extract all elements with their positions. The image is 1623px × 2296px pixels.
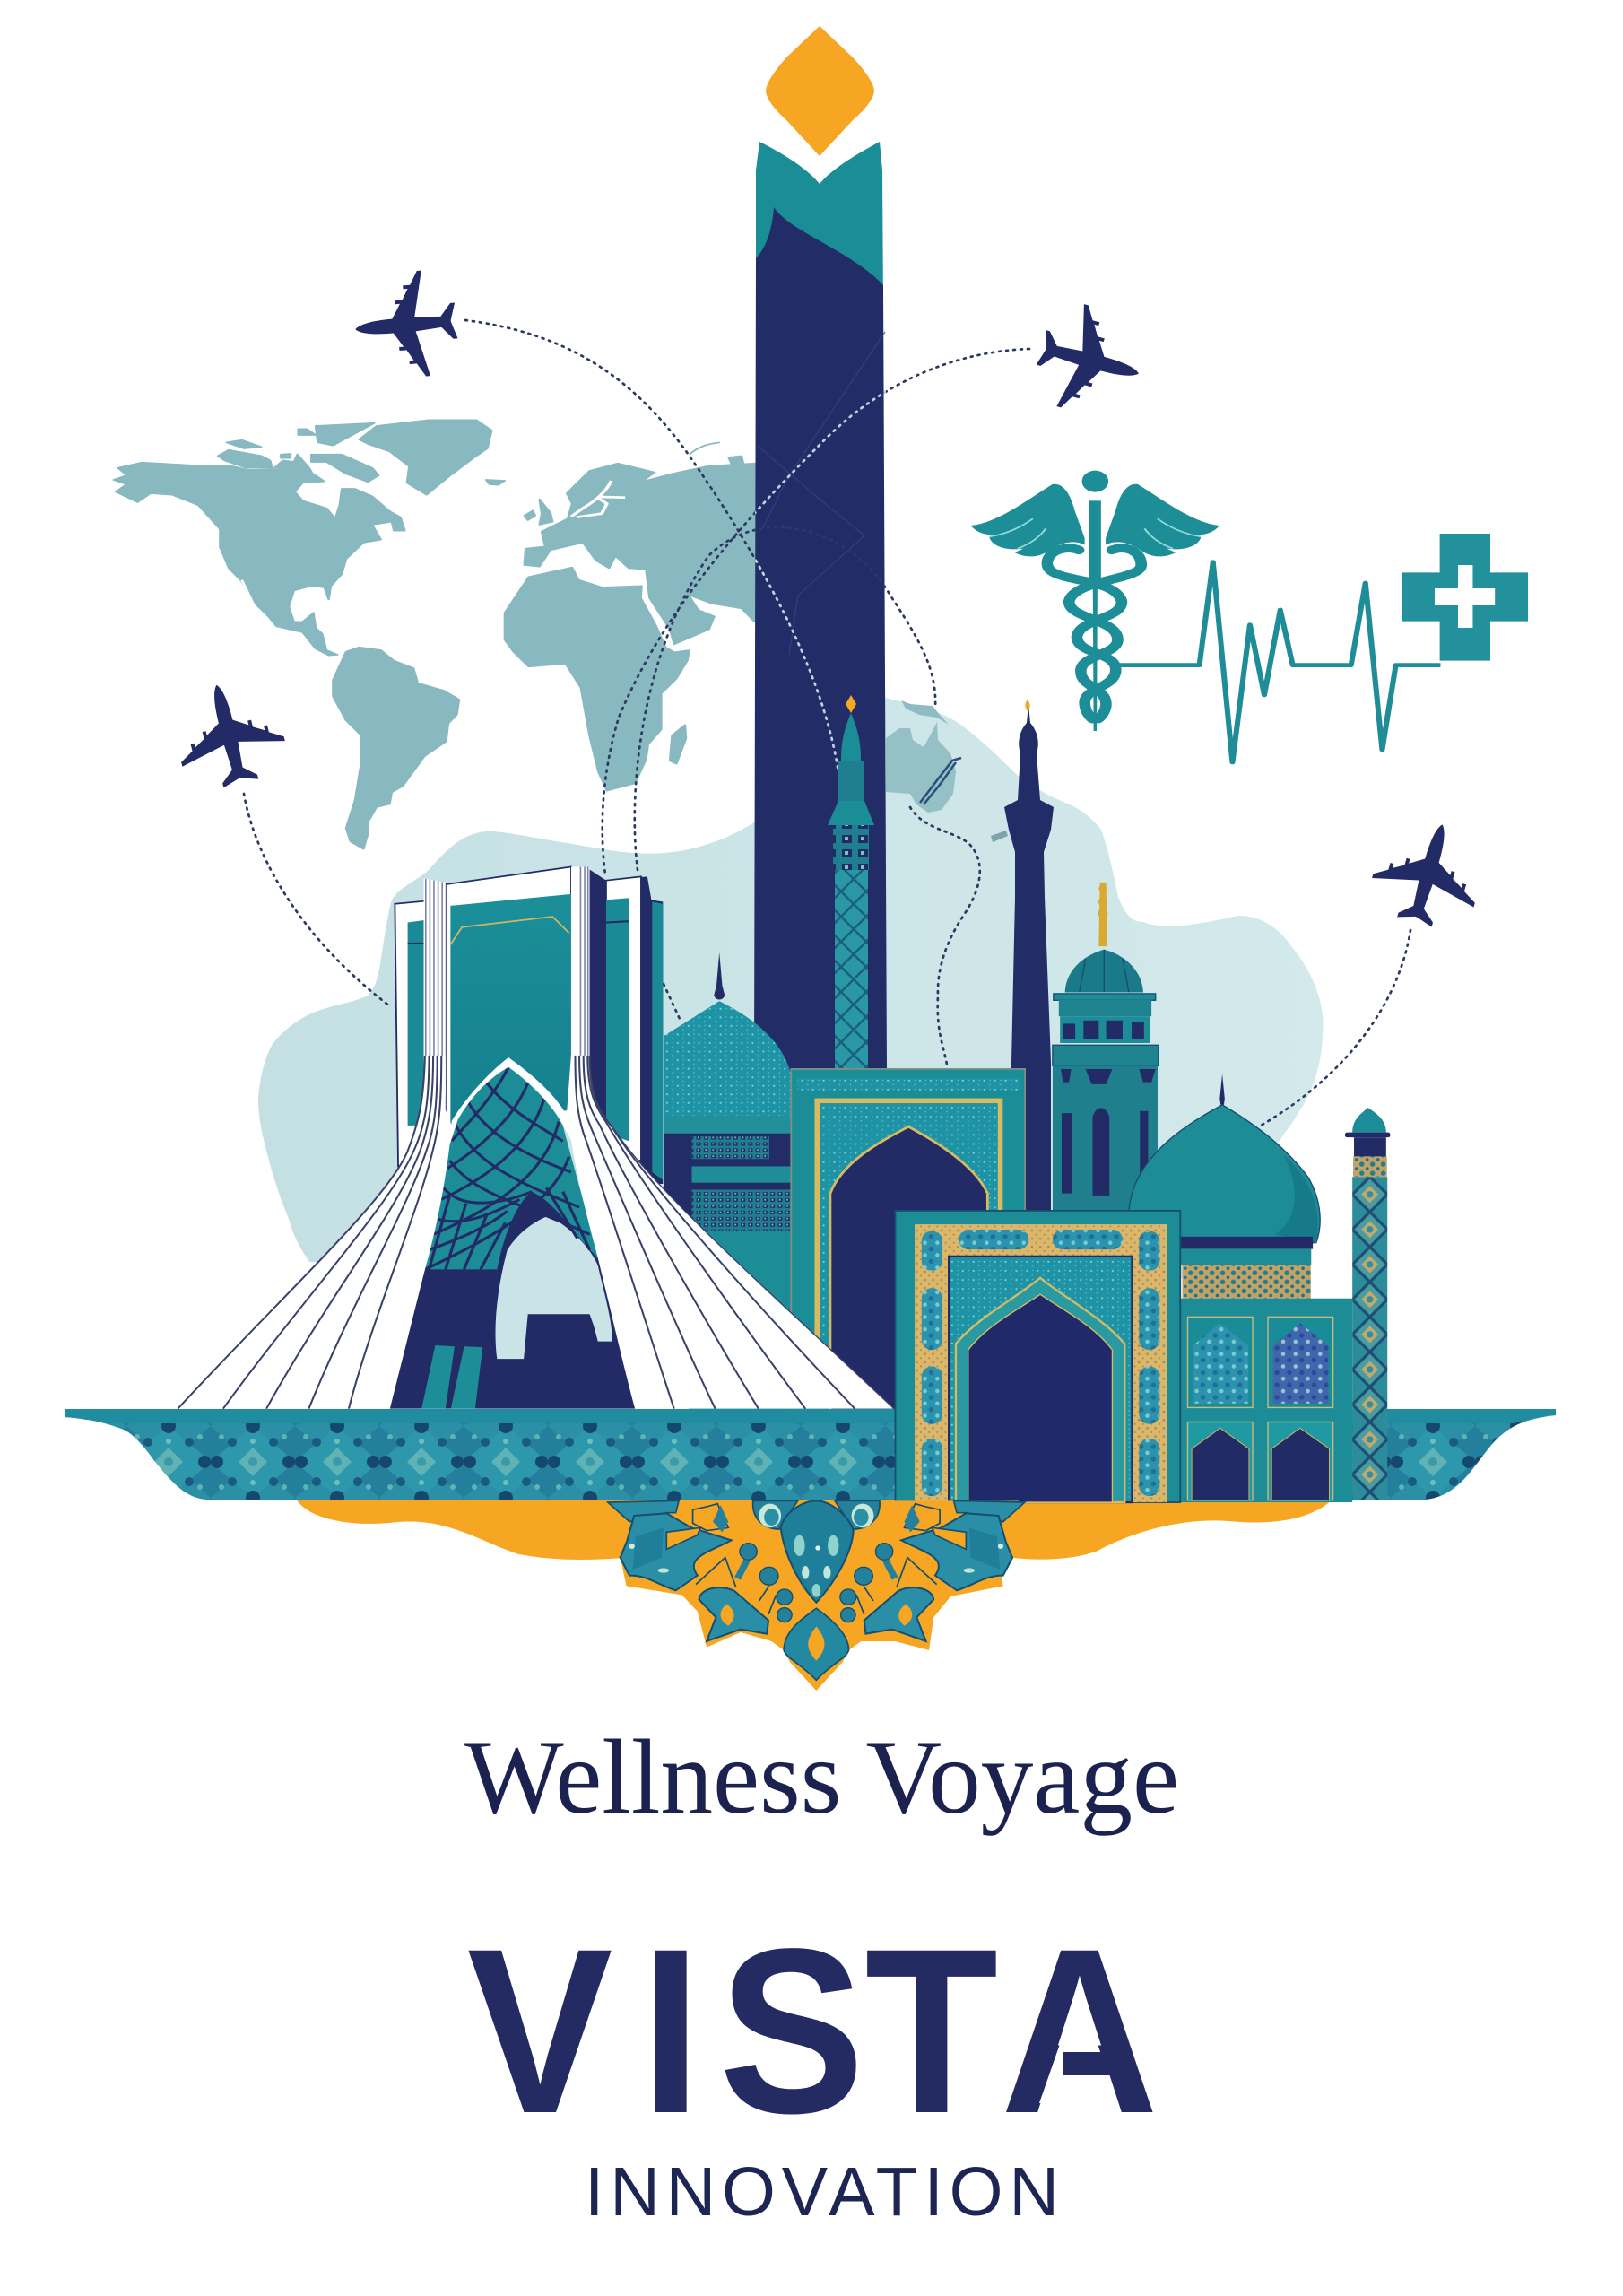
teal tower crown xyxy=(756,142,883,305)
thin lattice minaret xyxy=(1345,1108,1390,1500)
bottom petal xyxy=(784,1608,849,1680)
gate gold arch frame xyxy=(956,1278,1124,1502)
tagline: INNOVATION: INNOVATION xyxy=(585,2153,1059,2231)
ornament gold silhouette xyxy=(608,1500,1019,1691)
background blob xyxy=(258,698,1323,1300)
australia and new guinea on the map xyxy=(886,700,961,813)
azadi tower xyxy=(178,867,894,1409)
medical cross xyxy=(1402,534,1528,661)
central petal xyxy=(781,1500,854,1603)
south america xyxy=(333,648,459,849)
gate top medallions xyxy=(959,1230,1028,1249)
patterned dome xyxy=(664,1001,794,1118)
dome drum xyxy=(664,1116,792,1134)
azadi left frame xyxy=(395,901,425,1166)
greenland xyxy=(360,420,491,495)
plane right xyxy=(1364,810,1493,936)
left half ornament xyxy=(608,1500,798,1641)
azadi left leg xyxy=(178,1056,452,1409)
navy tower shaft xyxy=(754,207,887,1072)
central tower xyxy=(754,26,887,1072)
lattice minaret beside tower xyxy=(828,695,874,1072)
domed minaret xyxy=(1053,883,1159,1210)
plane top left xyxy=(351,268,461,382)
navy minaret xyxy=(1004,704,1054,1220)
azadi pointed arch band xyxy=(449,1057,574,1145)
right mosque complex xyxy=(895,883,1390,1502)
british isles xyxy=(525,500,552,525)
route over tower xyxy=(755,390,886,770)
arctic islands xyxy=(218,423,378,482)
azadi base pillars xyxy=(421,1345,482,1409)
big teal dome xyxy=(1129,1074,1320,1299)
north america xyxy=(114,463,404,656)
plane top right xyxy=(1028,296,1152,425)
azadi arch opening xyxy=(495,1216,612,1359)
title: Wellness Voyage: Wellness Voyage xyxy=(464,1718,1179,1836)
orange flame finial xyxy=(766,26,874,156)
front mosque gate xyxy=(895,1211,1180,1502)
caduceus xyxy=(971,471,1219,731)
plane left xyxy=(165,673,292,796)
eastern arctic island xyxy=(729,456,746,477)
dotted flight routes xyxy=(244,320,1410,1126)
medical symbols xyxy=(971,471,1528,762)
africa xyxy=(505,568,690,791)
small patterned dome building xyxy=(664,952,795,1425)
route near small dome xyxy=(664,984,680,1019)
azadi lower navy body xyxy=(390,1192,637,1409)
azadi lattice vault xyxy=(425,1067,598,1269)
gate side panels xyxy=(922,1231,942,1270)
side building with panels xyxy=(1180,1299,1352,1502)
route from plane right xyxy=(1261,930,1410,1126)
orange wave band xyxy=(295,1497,1335,1560)
iceland xyxy=(486,480,505,485)
minaret side bar xyxy=(991,831,1008,842)
teal platform xyxy=(65,1409,1556,1500)
route from australia to gate xyxy=(910,807,980,1065)
dome finial xyxy=(714,952,725,1000)
azadi central panel xyxy=(446,867,571,1126)
route from plane top right xyxy=(603,349,1029,874)
minaret flame tip xyxy=(1025,700,1030,711)
floral ornament xyxy=(608,1500,1025,1691)
azadi columns xyxy=(424,879,446,1094)
heartbeat line xyxy=(1120,562,1440,762)
world map xyxy=(114,420,755,849)
letter A crossbar detail xyxy=(1039,2044,1118,2103)
rear gate navy arch xyxy=(830,1126,987,1432)
gate navy arch door xyxy=(968,1294,1112,1502)
route from plane top left xyxy=(465,320,838,772)
eurasia xyxy=(525,464,755,644)
azadi right block xyxy=(586,867,663,1184)
route between arch and australia xyxy=(635,527,935,870)
rear mosque gate xyxy=(791,1069,1025,1432)
azadi right leg xyxy=(567,1056,894,1409)
right half ornament xyxy=(835,1500,1025,1641)
brand name: VISTA: VISTA xyxy=(467,1900,1159,2162)
building body xyxy=(664,1134,795,1231)
madagascar xyxy=(670,725,686,764)
route from plane left xyxy=(244,794,390,1006)
